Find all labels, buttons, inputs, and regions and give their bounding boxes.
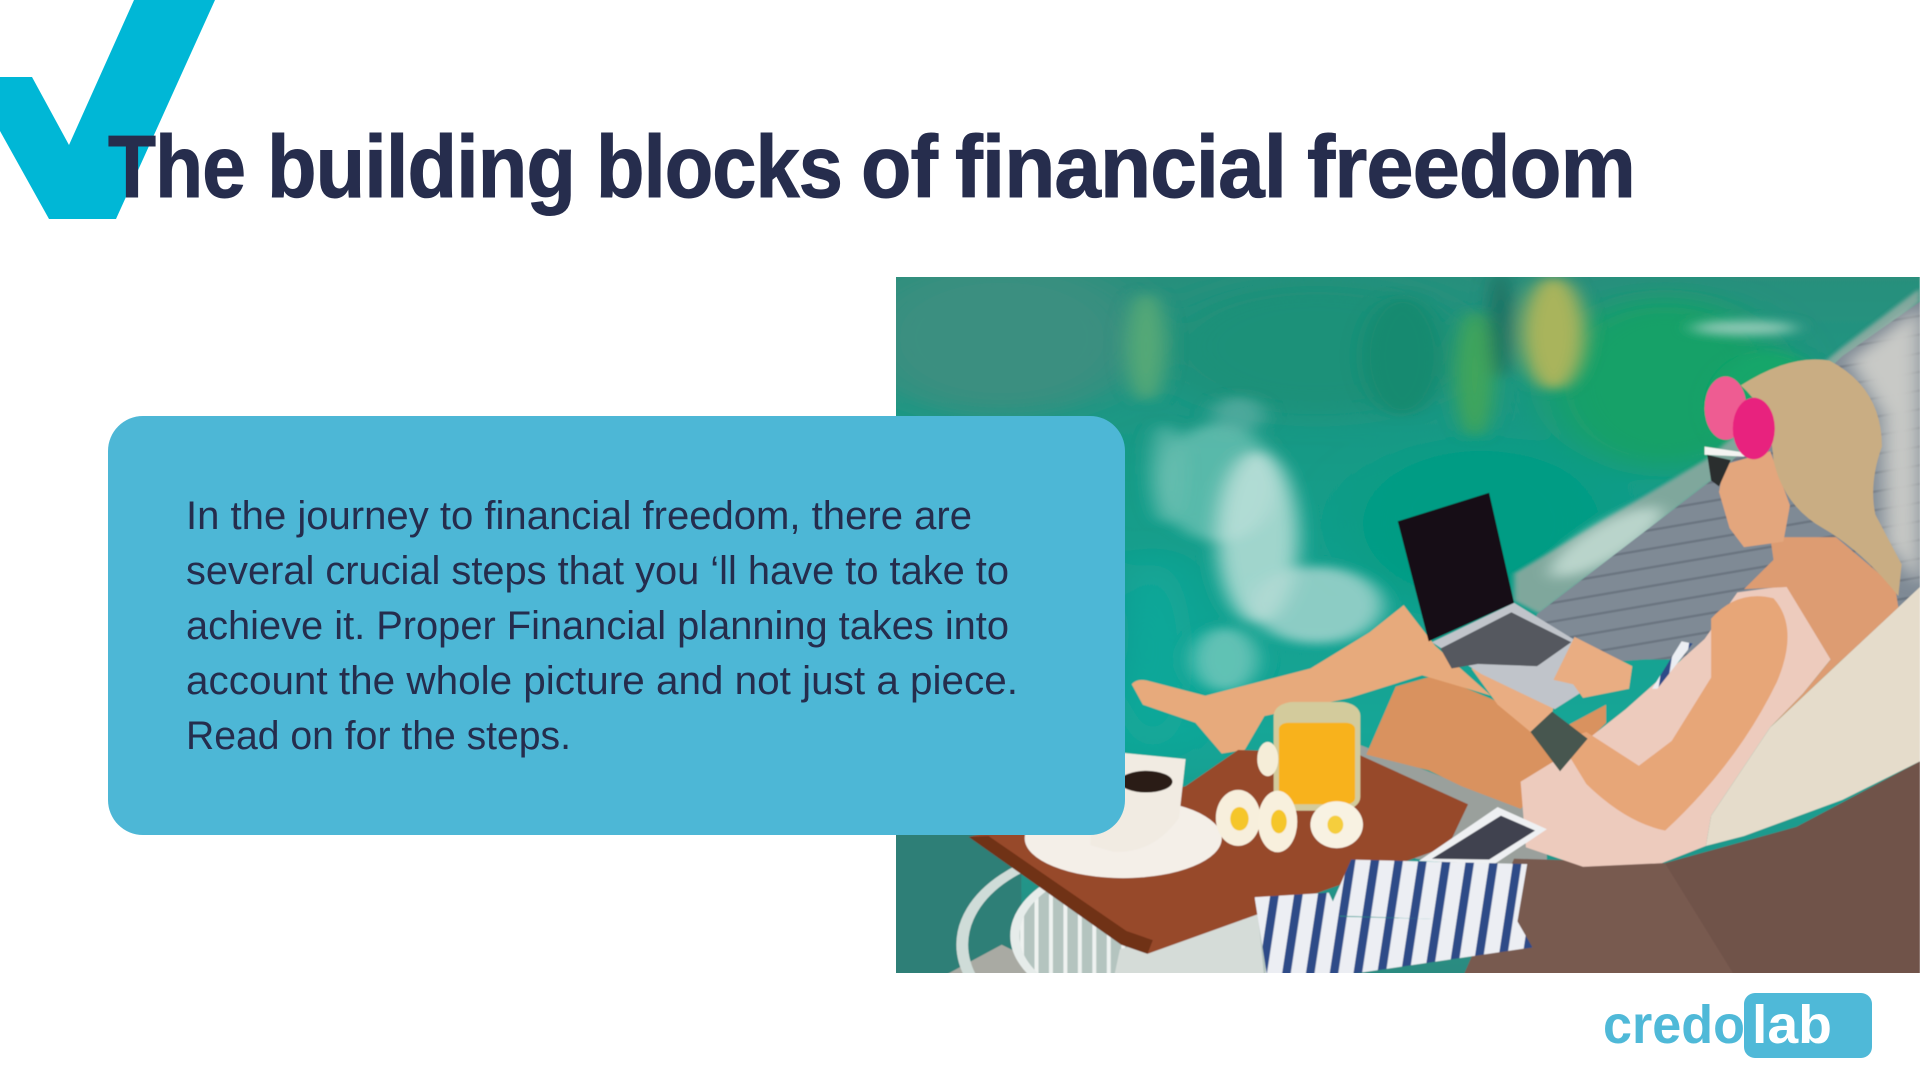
lower leg — [1366, 675, 1606, 809]
title: blocks — [596, 117, 842, 216]
wooden tray — [969, 750, 1468, 954]
left hand on laptop — [1471, 659, 1553, 736]
body paragraph — [186, 494, 1018, 758]
photo: woman working on laptop by a pool — [896, 277, 1920, 973]
sunglasses — [1705, 447, 1751, 486]
credolab logo — [1603, 993, 1872, 1058]
body paragraph: Read on for the steps. — [186, 714, 571, 758]
body paragraph: several crucial steps that you ‘ll have to take to — [186, 549, 1009, 593]
striped inner strap — [1652, 641, 1693, 689]
frangipani flowers — [1216, 742, 1363, 852]
bean bag — [1462, 761, 1920, 980]
hair — [1741, 359, 1902, 596]
title: of — [861, 117, 939, 216]
juice glass — [1274, 702, 1360, 811]
body paragraph: achieve it. Proper Financial planning takes into — [186, 604, 1009, 648]
body paragraph: account the whole picture and not just a piece. — [186, 659, 1018, 703]
right hand — [1553, 637, 1632, 698]
checkmark logo shape — [0, 0, 215, 219]
title — [108, 117, 1635, 216]
head and face — [1719, 451, 1790, 547]
title: freedom — [1307, 117, 1635, 216]
body paragraph: In the journey to financial freedom, there are — [186, 494, 972, 538]
credolab logo: lab — [1752, 995, 1832, 1055]
title: building — [267, 117, 575, 216]
striped notebooks — [1255, 860, 1532, 980]
credolab logo: credo — [1603, 995, 1745, 1055]
water — [844, 261, 1920, 980]
coffee cup and saucer — [1025, 750, 1222, 878]
title: financial — [955, 117, 1286, 216]
title: The — [108, 117, 245, 216]
arm — [1560, 596, 1788, 831]
laptop — [1398, 493, 1596, 709]
bracelets — [1530, 711, 1588, 771]
pool edge waterfall — [1514, 288, 1920, 614]
raised leg and foot — [1132, 605, 1491, 754]
text panel — [108, 416, 1125, 835]
pillow — [1706, 587, 1920, 846]
lower-left water and table — [890, 831, 1291, 1040]
pink flower — [1705, 376, 1775, 459]
smartphone — [1419, 807, 1547, 864]
dress — [1521, 586, 1831, 867]
deck under the table and legs — [1360, 744, 1548, 864]
wooden deck — [1521, 302, 1920, 668]
neck and back — [1744, 537, 1898, 727]
